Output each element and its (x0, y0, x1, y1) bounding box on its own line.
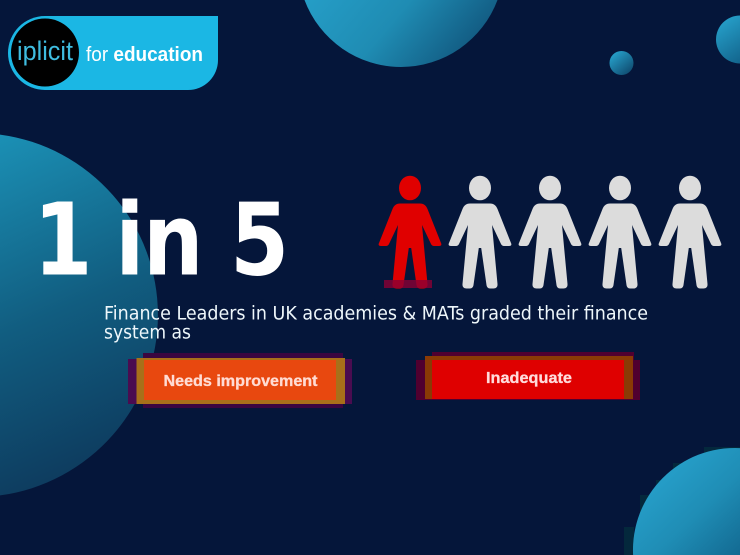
button: inadequate (416, 352, 640, 400)
person: grey 2 (519, 176, 581, 288)
headline statistic: 1 in 5 (33, 182, 289, 298)
label: Needs improvement (164, 373, 318, 390)
description text (104, 304, 648, 344)
label: Inadequate (486, 370, 572, 387)
decorative circle: left (0, 135, 158, 495)
decorative circle: top centre (304, 0, 498, 67)
decorative circle: top right (716, 16, 740, 64)
logo tagline: for education (86, 44, 203, 66)
logo (8, 16, 218, 90)
decorative circle: bottom right (624, 447, 740, 555)
person: grey 3 (589, 176, 651, 288)
pictogram: 1 of 5 people (379, 176, 721, 288)
person: grey 1 (449, 176, 511, 288)
description text: Finance Leaders in UK academies & MATs graded their finance (104, 304, 648, 324)
button: needs improvement (128, 353, 352, 408)
logo badge (8, 16, 218, 90)
person: grey 4 (659, 176, 721, 288)
logo wordmark: iplicit (17, 36, 73, 66)
person: red (379, 176, 441, 288)
decorative circle: small (610, 51, 634, 75)
description text: system as (104, 323, 191, 344)
logo black circle (11, 18, 79, 86)
